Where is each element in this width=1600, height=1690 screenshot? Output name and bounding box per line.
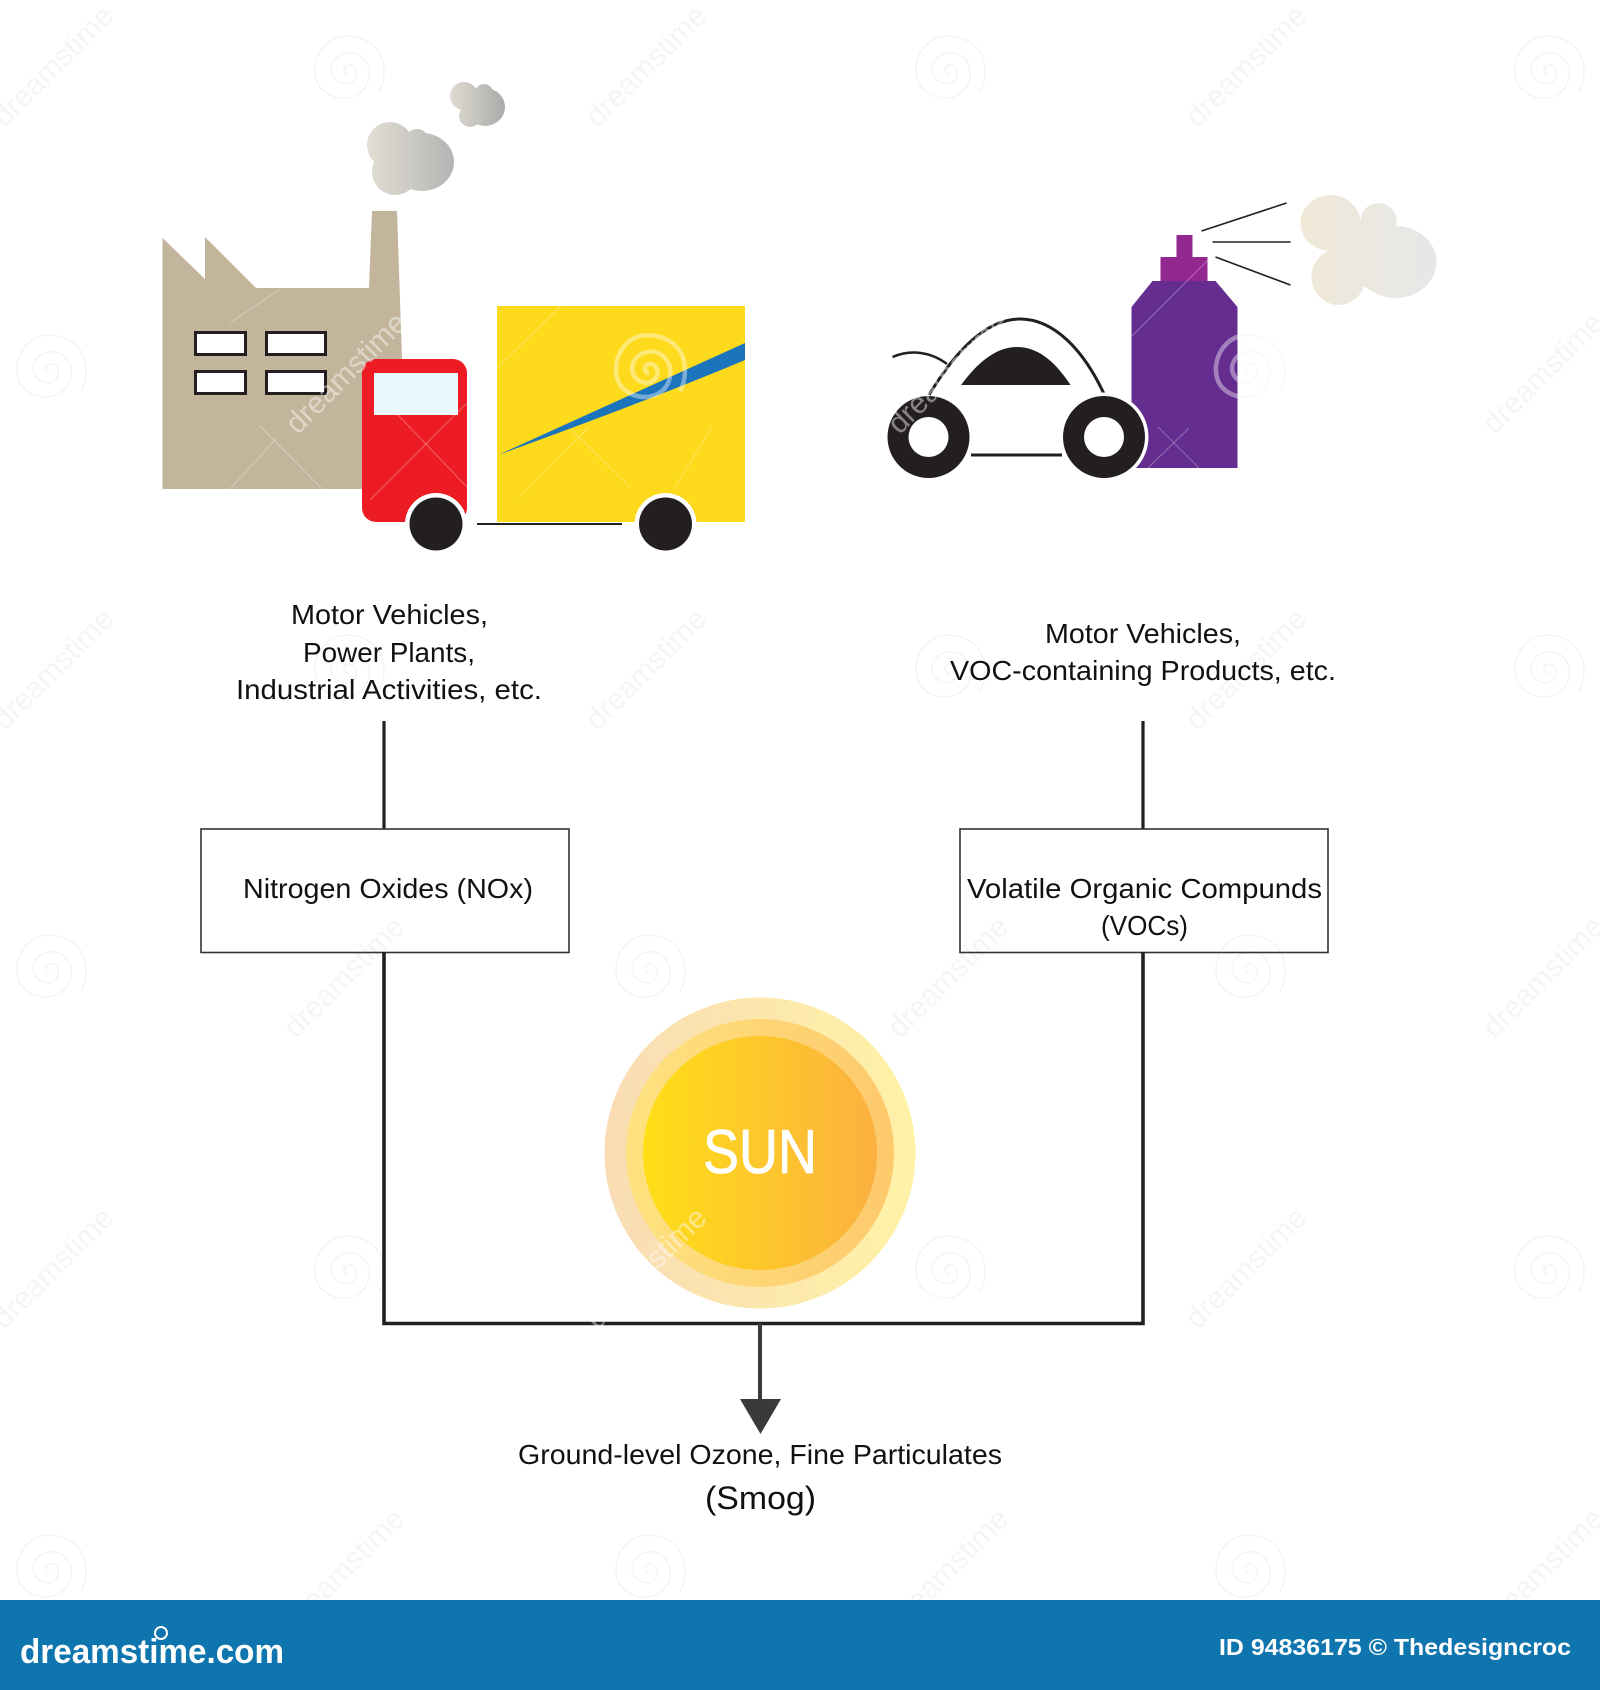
text: left sources: Industrial Activities, etc. — [236, 674, 542, 705]
car floor — [971, 454, 1062, 456]
icon: factory with smoke — [162, 82, 505, 489]
car rear wheel — [888, 396, 970, 478]
text: smog: (Smog) — [705, 1480, 816, 1516]
car hood line — [892, 353, 947, 364]
icon: sun — [604, 998, 916, 1308]
text: right sources — [950, 618, 1336, 686]
truck cab — [362, 359, 467, 522]
icon: car — [888, 319, 1148, 482]
footer credit: ID 94836175 © Thedesigncroc — [1219, 1634, 1571, 1660]
text: left sources: Motor Vehicles, — [291, 599, 488, 630]
box: nitrogen oxides: Nitrogen Oxides (NOx) — [243, 873, 533, 904]
spray lines — [1202, 203, 1290, 285]
watermark: overlay on coloured shapes — [230, 260, 1285, 1335]
truck cab window — [374, 373, 458, 415]
watermark: background spirals and text: dreamstime — [277, 910, 411, 1044]
icon: delivery truck — [362, 306, 745, 555]
factory building — [162, 211, 402, 489]
arrow: to smog — [740, 1323, 781, 1434]
watermark: background spirals and text: dreamstime — [881, 910, 1015, 1044]
text: result — [518, 1439, 1002, 1516]
truck rear wheel — [634, 493, 696, 555]
truck stripe — [498, 343, 745, 455]
car roof — [929, 319, 1105, 396]
watermark: background spirals and text: dreamstime — [579, 0, 713, 133]
watermark: background spirals and text: dreamstime — [579, 602, 713, 736]
text: result: Ground-level Ozone, Fine Particulates — [518, 1439, 1002, 1470]
box: volatile organic compounds: Volatile Organic Compunds — [967, 873, 1322, 904]
box: volatile organic compounds — [960, 829, 1328, 952]
watermark: background spirals and text: dreamstime — [881, 1502, 1015, 1636]
sun label: SUN — [703, 1118, 817, 1187]
factory windows — [196, 332, 326, 394]
truck chassis — [477, 523, 622, 525]
text: right sources: Motor Vehicles, — [1045, 618, 1241, 649]
car window — [961, 347, 1070, 385]
can body — [1132, 281, 1238, 468]
text: left sources — [236, 599, 542, 705]
truck cargo box — [497, 306, 745, 522]
factory smoke small — [450, 82, 505, 127]
text: left sources: Power Plants, — [303, 637, 475, 668]
box: nitrogen oxides — [201, 829, 569, 952]
text: right sources: VOC-containing Products, etc. — [950, 655, 1336, 686]
icon: spray can — [1132, 195, 1436, 468]
watermark: background spirals and text: dreamstime — [1179, 602, 1313, 736]
watermark: background spirals and text: dreamstime — [277, 1502, 411, 1636]
watermark: overlay on coloured shapes: dreamstime — [881, 306, 1015, 440]
truck front wheel — [405, 493, 467, 555]
car front wheel — [1060, 392, 1148, 482]
can nozzle — [1160, 235, 1208, 281]
connector: left source to NOx — [382, 721, 386, 829]
watermark: overlay on coloured shapes: dreamstime — [579, 1201, 713, 1335]
watermark: background spirals and text: dreamstime — [1179, 1201, 1313, 1335]
connector: merging lines — [384, 952, 1143, 1324]
watermark: overlay on coloured shapes: dreamstime — [279, 306, 413, 440]
box: volatile organic compounds: (VOCs) — [1101, 910, 1188, 941]
footer logo: dreamstime.com — [20, 1633, 284, 1671]
watermark: background spirals and text: dreamstime — [1179, 0, 1313, 133]
spray cloud — [1300, 195, 1436, 305]
footer band — [0, 1600, 1600, 1690]
connector: right source to VOCs — [1141, 721, 1145, 829]
factory smoke large — [367, 122, 454, 195]
